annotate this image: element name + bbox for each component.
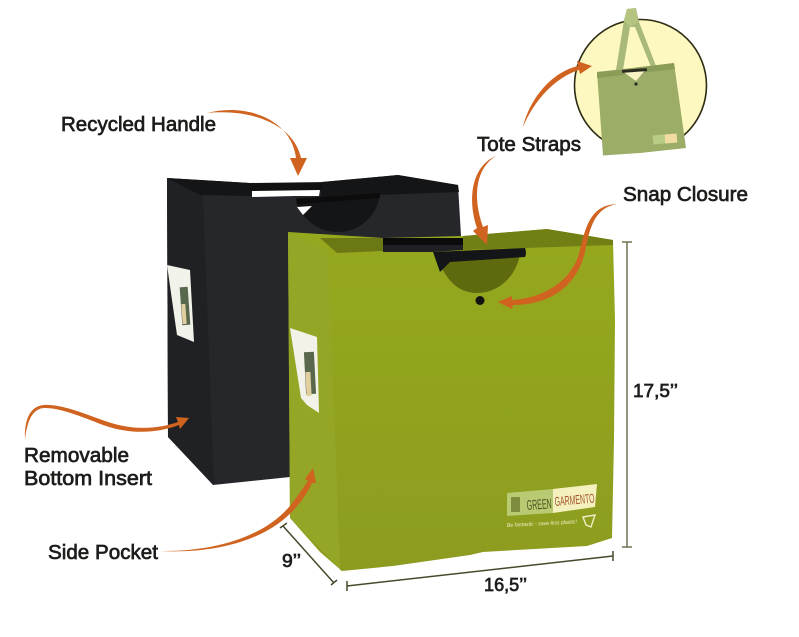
dimension: height — [622, 242, 632, 547]
green bag side panel — [288, 232, 342, 571]
labels — [24, 113, 748, 595]
black bag — [167, 175, 461, 485]
black bag side pocket card — [167, 265, 194, 342]
folded tote bag — [597, 63, 686, 156]
green bag handle front — [433, 248, 526, 272]
label: height 17,5: 17,5’’ — [633, 381, 678, 401]
inset circle background — [574, 20, 706, 152]
brand logo: Green Garmento — [507, 484, 597, 529]
brand logo: Green Garmento: Be fantastic - save less plastic! — [507, 519, 577, 529]
arrow: recycled handle — [207, 110, 307, 176]
dimension: width — [347, 551, 613, 591]
arrow: removable insert — [25, 405, 189, 440]
label: Tote Straps: Tote Straps — [477, 133, 581, 156]
green bag side pocket card — [290, 328, 319, 413]
dimension lines — [280, 242, 632, 591]
green bag — [288, 229, 615, 571]
brand logo: Green Garmento: GREEN — [526, 495, 552, 513]
green bag handle back — [383, 238, 463, 252]
black bag body — [167, 175, 461, 485]
black bag handle — [250, 183, 380, 232]
label: Removable Bottom Insert: Bottom Insert — [24, 467, 152, 490]
green bag inner rim — [320, 238, 383, 253]
arrows — [25, 61, 617, 551]
label: Snap Closure: Snap Closure — [623, 183, 748, 206]
label: Side Pocket: Side Pocket — [48, 541, 158, 564]
dimension: depth — [280, 523, 337, 585]
label: depth 9: 9’’ — [282, 551, 301, 571]
green bag body — [288, 229, 615, 571]
arrow: side pocket — [160, 468, 316, 551]
icon: snap closure button — [476, 296, 484, 305]
label: Recycled Handle: Recycled Handle — [61, 113, 216, 136]
arrow: snap closure — [498, 204, 617, 309]
tote straps — [616, 8, 656, 70]
tote inset — [574, 8, 706, 156]
black bag folded rim — [167, 175, 459, 200]
arrow: tote straps to bag — [472, 156, 496, 245]
label: width 16,5: 16,5’’ — [484, 575, 527, 595]
green bag back fold — [463, 229, 613, 250]
green bag handle cutout — [437, 254, 520, 293]
brand logo: Green Garmento: GARMENTO — [554, 491, 595, 509]
black bag side panel — [167, 178, 214, 485]
arrow: tote straps to inset — [523, 61, 592, 127]
label: Removable Bottom Insert: Removable — [24, 444, 129, 467]
